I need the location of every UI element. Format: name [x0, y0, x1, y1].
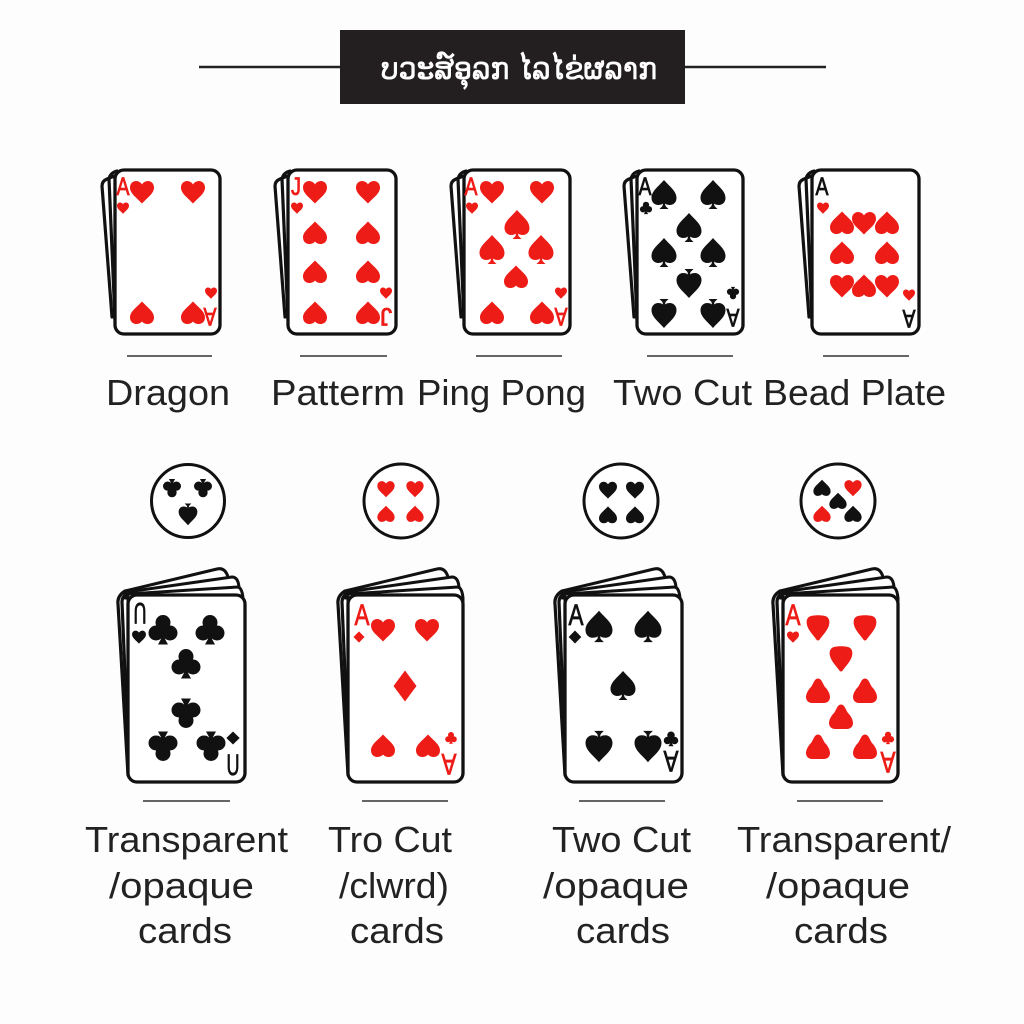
label: Transparent/ /opaque cards: cards	[794, 910, 888, 951]
card fan: Bead Plate: A	[816, 173, 829, 201]
label: Tro Cut /clwrd) cards	[328, 801, 452, 951]
label: Transparent/ /opaque cards: Transparent/	[737, 819, 951, 860]
label: Tro Cut /clwrd) cards: Tro Cut	[328, 819, 452, 860]
card fan: Tro Cut hearts: A	[442, 747, 456, 780]
card fan: Ping Pong	[451, 170, 570, 334]
title banner: ບວະສ໌ອຸລກ ໄລໄຂ່ຜລາກ	[381, 51, 657, 90]
label: Dragon: Dragon	[106, 372, 230, 413]
label: Two Cut /opaque cards: cards	[576, 910, 670, 951]
badge: red hearts	[364, 464, 438, 538]
card fan: Two Cut spades: A	[664, 744, 678, 777]
card fan: Transparent red: A	[786, 599, 800, 632]
card fan: Ping Pong: A	[554, 302, 568, 330]
card fan: Pattern: J	[291, 173, 301, 201]
title banner	[199, 30, 826, 104]
card fan: Pattern	[275, 170, 396, 334]
card fan: Transparent clubs: U	[134, 596, 146, 629]
card fan: Transparent clubs	[118, 569, 245, 782]
label: Transparent /opaque cards: /opaque	[109, 865, 254, 906]
label: Two Cut	[613, 356, 752, 413]
label: Ping Pong: Ping Pong	[417, 372, 586, 413]
card fan: Dragon: A	[203, 302, 216, 330]
card fan: Tro Cut hearts: A	[354, 599, 370, 632]
badge: mixed suits	[801, 464, 875, 538]
label: Two Cut /opaque cards: Two Cut	[552, 819, 691, 860]
card fan: Two Cut: A	[638, 173, 652, 201]
badge: clubs	[152, 464, 224, 538]
card fan: Pattern: J	[380, 302, 392, 330]
card fan: Two Cut spades: A	[568, 599, 584, 632]
card fan: Dragon: A	[116, 173, 130, 201]
card fan: Bead Plate: A	[902, 304, 916, 332]
card fan: Two Cut	[624, 170, 743, 334]
label: Transparent /opaque cards	[85, 801, 288, 951]
label: Two Cut: Two Cut	[613, 372, 752, 413]
card fan: Two Cut spades	[555, 569, 682, 782]
label: Dragon	[106, 356, 230, 413]
label: Transparent /opaque cards: Transparent	[85, 819, 288, 860]
label: Two Cut /opaque cards	[543, 801, 691, 951]
label: Tro Cut /clwrd) cards: cards	[350, 910, 444, 951]
label: Pattern: Patterm	[271, 372, 405, 413]
label: Bead Plate: Bead Plate	[763, 372, 946, 413]
label: Pattern	[271, 356, 405, 413]
label: Tro Cut /clwrd) cards: /clwrd)	[339, 865, 449, 906]
label: Two Cut /opaque cards: /opaque	[543, 865, 689, 906]
card fan: Bead Plate	[799, 170, 919, 334]
card fan: Transparent red: A	[880, 745, 896, 778]
card fan: Transparent clubs: U	[226, 749, 240, 782]
card fan: Dragon	[102, 170, 220, 334]
label: Transparent /opaque cards: cards	[138, 910, 232, 951]
card fan: Two Cut: A	[726, 303, 740, 331]
label: Transparent/ /opaque cards	[737, 801, 951, 951]
card fan: Tro Cut hearts	[338, 569, 463, 782]
card fan: Transparent red	[773, 569, 898, 782]
badge: black hearts	[584, 464, 658, 538]
label: Transparent/ /opaque cards: /opaque	[766, 865, 910, 906]
card fan: Ping Pong: A	[464, 173, 478, 201]
